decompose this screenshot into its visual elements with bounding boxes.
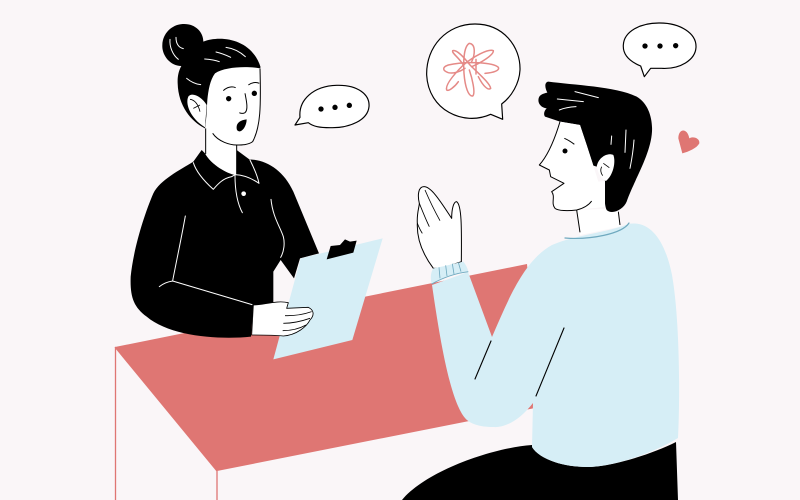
woman ear	[187, 95, 207, 127]
man speech bubble	[623, 23, 696, 77]
woman hand	[252, 302, 313, 336]
man neck	[577, 208, 620, 235]
clipboard	[252, 238, 383, 359]
man hair	[538, 82, 652, 212]
shirt button	[241, 191, 246, 196]
sweater details	[475, 223, 629, 396]
man face outline and features	[539, 122, 620, 232]
man raised hand	[417, 187, 468, 284]
finger lines	[283, 312, 312, 331]
atom scribble	[444, 43, 499, 96]
atom thought bubble	[427, 24, 520, 119]
cuff ribbing	[432, 262, 468, 284]
woman	[131, 24, 319, 338]
woman speech bubble	[295, 85, 369, 128]
woman torso	[131, 150, 319, 338]
woman facial features	[190, 68, 260, 175]
woman face	[206, 67, 260, 145]
man face	[539, 122, 605, 211]
desk	[115, 264, 540, 500]
hand finger lines	[417, 190, 440, 233]
sweater cuff	[431, 262, 468, 284]
man head	[538, 82, 652, 235]
woman hair highlights	[170, 37, 245, 85]
man hair highlights	[557, 92, 634, 168]
icon: heart	[678, 130, 699, 153]
woman neck	[205, 123, 237, 175]
clipboard clip	[327, 239, 357, 259]
man sweater	[432, 223, 679, 467]
woman hair and bun	[162, 24, 261, 128]
man ear	[597, 154, 614, 181]
woman shirt lines	[159, 160, 284, 305]
man ear lines	[601, 163, 609, 176]
man legs	[402, 442, 678, 500]
